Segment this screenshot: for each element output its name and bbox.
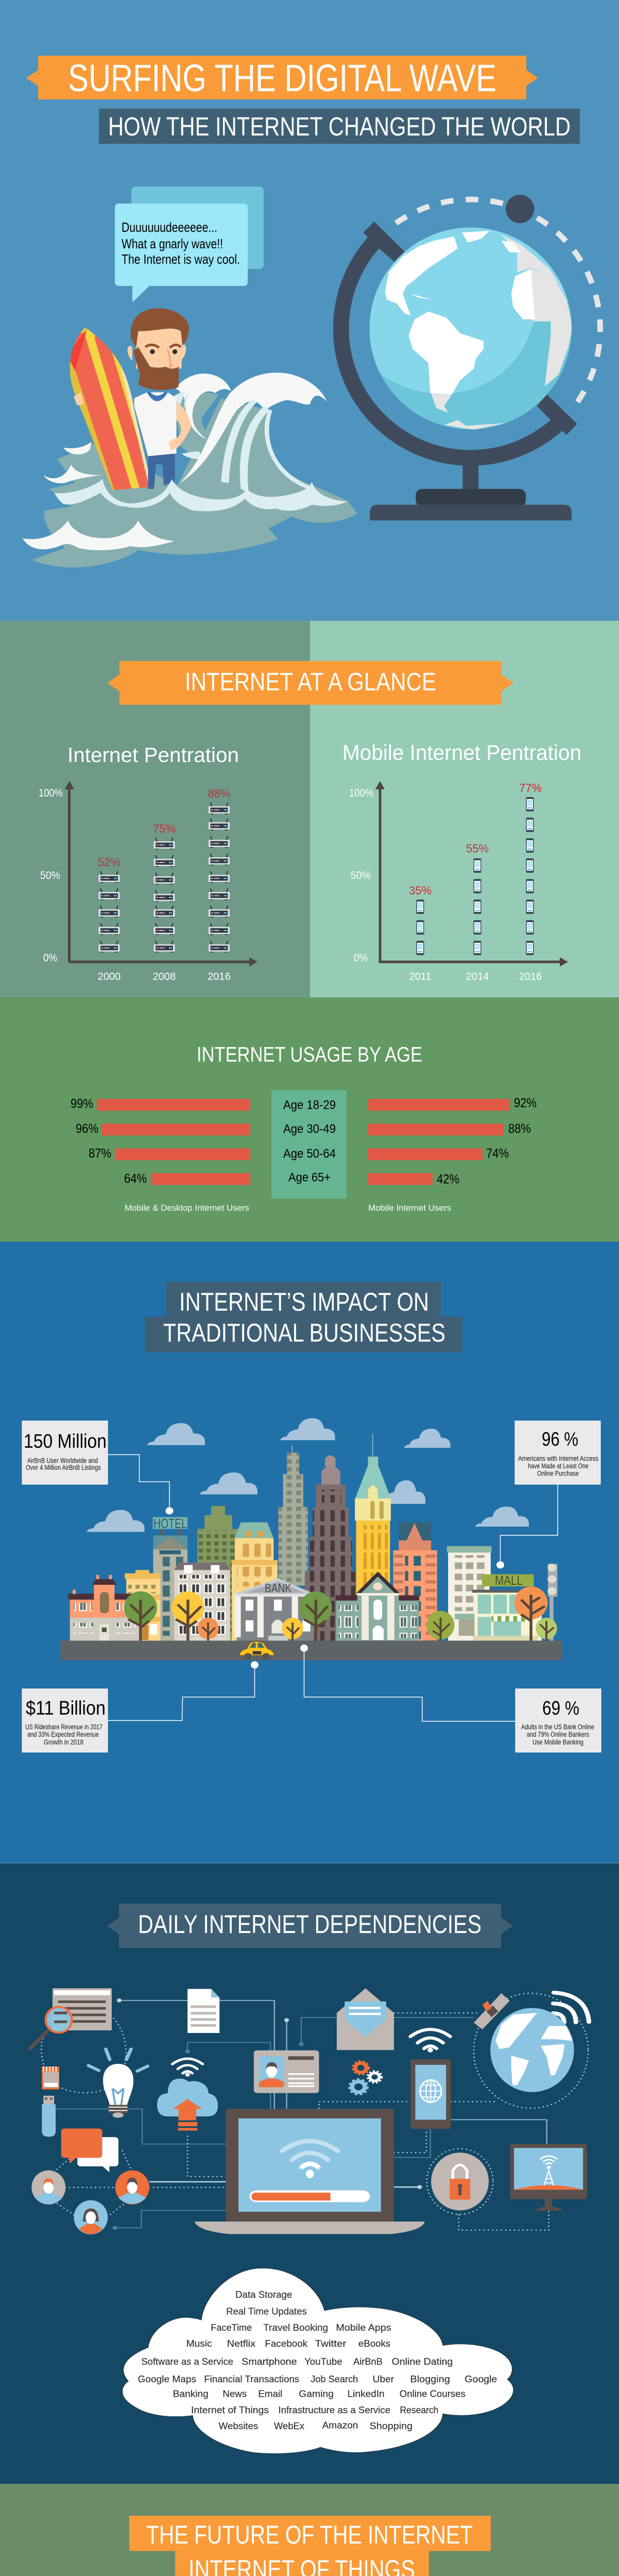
road: [60, 1640, 562, 1660]
icon: smartphone: [410, 2029, 451, 2129]
left bars: mobile and desktop users: Mobile & Desktop Internet Users: [125, 1203, 249, 1213]
word cloud: Banking: [173, 2389, 209, 2399]
sign labels: [153, 1516, 523, 1595]
chart: mobile internet penetration: 50%: [351, 870, 371, 882]
word cloud: FaceTime: [211, 2323, 252, 2333]
panel: future of the internet: [0, 2484, 619, 2576]
icon: gears: [349, 2061, 382, 2094]
word cloud: Research: [400, 2405, 439, 2415]
chart: mobile internet penetration: Mobile Internet Pentration: [342, 740, 581, 765]
chart: internet penetration: Internet Pentration: [67, 744, 239, 767]
chart: internet penetration: 0%: [43, 952, 57, 964]
word cloud: Facebook: [265, 2338, 308, 2349]
word cloud: Amazon: [322, 2420, 358, 2430]
green building: [197, 1506, 239, 1640]
word cloud: Internet of Things: [191, 2405, 269, 2415]
right bars: mobile users: [368, 1096, 537, 1213]
panel: internet usage by age: [0, 997, 619, 1242]
icon: envelope: [337, 1988, 394, 2050]
panel: impact on traditional businesses: [0, 1242, 619, 1863]
word cloud: Smartphone: [242, 2357, 297, 2367]
column 2011: 35%: [409, 884, 432, 897]
word cloud: eBooks: [358, 2338, 390, 2349]
heading block: [145, 1282, 462, 1352]
panel: internet at a glance: [0, 621, 619, 997]
icon: monitor with tower: [510, 2144, 587, 2211]
word cloud: Google Maps: [138, 2374, 196, 2384]
column 2016: 2016: [519, 971, 542, 982]
heading block: THE FUTURE OF THE INTERNET: [146, 2520, 473, 2549]
heading ribbon: [108, 661, 513, 705]
chart: mobile internet penetration: [342, 740, 581, 982]
heading: INTERNET USAGE BY AGE: [197, 1043, 422, 1066]
word cloud: WebEx: [274, 2421, 304, 2431]
stat card: 69 percent: and 79% Online Bankers: [527, 1730, 589, 1738]
stat card: 11 billion: and 33% Expected Revenue: [27, 1730, 99, 1738]
age column: Age 18-29: [283, 1098, 336, 1112]
tall grey tower: [278, 1446, 308, 1586]
stat card: 69 percent: 69 %: [542, 1698, 579, 1719]
stat card: 96 percent: Online Purchase: [537, 1469, 579, 1478]
panel: hero: [23, 56, 603, 568]
word cloud: Real Time Updates: [226, 2307, 307, 2317]
foam: [23, 442, 348, 550]
stat card: 150 million: 150 Million: [24, 1431, 107, 1452]
age column: [271, 1090, 347, 1198]
icon: light bulb: [89, 2049, 148, 2118]
heading ribbon: INTERNET AT A GLANCE: [185, 668, 436, 696]
icon: satellite: [474, 1986, 596, 2032]
column 2016: [519, 782, 542, 982]
taxi: [239, 1641, 274, 1659]
stat card: 11 billion: Growth in 2018: [44, 1738, 83, 1746]
chart: internet penetration: [39, 744, 257, 982]
icon: laptop: [195, 2109, 425, 2234]
column 2016: [208, 787, 231, 982]
word cloud: Blogging: [410, 2374, 450, 2384]
hotel: [153, 1517, 187, 1640]
icon: usb stick: [42, 2096, 56, 2137]
word cloud: Uber: [373, 2374, 394, 2384]
chapel: [336, 1572, 419, 1640]
word cloud: Email: [258, 2389, 282, 2399]
stat card: 69 percent: [515, 1689, 601, 1752]
yellow tower: [355, 1434, 391, 1595]
stat card: 96 percent: Americans with Internet Access: [518, 1454, 598, 1462]
surfer: [74, 308, 191, 489]
word cloud: Music: [186, 2338, 212, 2349]
network lines: [41, 1993, 588, 2230]
speech bubble: The Internet is way cool.: [122, 251, 240, 267]
word cloud: Job Search: [311, 2374, 358, 2384]
icon: document with magnifier: [30, 1988, 112, 2048]
word cloud: Online Dating: [391, 2357, 453, 2367]
stat card: 150 million: [22, 1421, 108, 1484]
heading block: INTERNET’S IMPACT ON: [179, 1287, 429, 1316]
column 2014: 55%: [466, 842, 489, 855]
column 2000: [98, 856, 121, 982]
icon: padlock: [431, 2153, 489, 2210]
column 2008: 75%: [153, 822, 176, 835]
word cloud: Gaming: [299, 2389, 334, 2399]
right bars: mobile users: Mobile Internet Users: [368, 1203, 451, 1213]
column 2000: 52%: [98, 856, 121, 869]
left bars: mobile and desktop users: 64%: [124, 1172, 147, 1186]
chart: mobile internet penetration: 100%: [349, 787, 373, 799]
trees: [124, 1586, 557, 1640]
left bars: mobile and desktop users: [71, 1096, 250, 1213]
icon: id card: [254, 2050, 319, 2093]
chart: mobile internet penetration: 0%: [354, 952, 368, 964]
mall: [472, 1564, 557, 1640]
word cloud: Financial Transactions: [204, 2374, 299, 2384]
bank: [234, 1578, 315, 1640]
speech bubble: Duuuuuudeeeeee...: [122, 219, 217, 235]
stat card: 11 billion: [22, 1689, 108, 1752]
illustration: city skyline: [60, 1418, 562, 1660]
illustration: surfer and waves: [23, 308, 357, 567]
panel: daily internet dependencies: [0, 1863, 619, 2484]
connector lines: [108, 1455, 558, 1721]
icon: cloud upload: [157, 2059, 218, 2130]
column 2011: [409, 884, 432, 982]
left mansion: [68, 1575, 142, 1640]
sign labels: HOTEL: [153, 1516, 187, 1531]
stat card: 150 million: AirBnB User Worldwide and: [27, 1456, 98, 1464]
age column: Age 65+: [288, 1171, 331, 1184]
stat card: 11 billion: $11 Billion: [26, 1698, 106, 1719]
right bars: mobile users: 74%: [486, 1146, 509, 1161]
word cloud: Software as a Service: [141, 2357, 233, 2367]
column 2016: 2016: [208, 971, 231, 982]
word cloud: Data Storage: [235, 2290, 292, 2300]
stat card: 150 million: Over 4 Million AirBnB Listings: [26, 1463, 101, 1471]
salmon building: [393, 1522, 437, 1640]
word cloud: Google: [465, 2374, 497, 2384]
word cloud: LinkedIn: [348, 2389, 385, 2399]
word cloud: YouTube: [304, 2357, 342, 2367]
stat card: 96 percent: 96 %: [542, 1429, 578, 1450]
left bars: mobile and desktop users: 87%: [89, 1146, 111, 1161]
right bars: mobile users: 42%: [437, 1172, 459, 1187]
left bars: mobile and desktop users: 96%: [76, 1122, 98, 1136]
heading ribbon: [107, 1904, 513, 1948]
word cloud: Infrastructure as a Service: [278, 2405, 390, 2415]
word cloud: [122, 2268, 513, 2453]
icon: people: [31, 2171, 149, 2234]
speech bubble: [115, 187, 264, 302]
right bars: mobile users: 88%: [508, 1122, 531, 1136]
chart: internet penetration: 100%: [39, 787, 63, 799]
stat card: 96 percent: [515, 1421, 600, 1484]
sign labels: MALL: [495, 1573, 523, 1588]
heading block: TRADITIONAL BUSINESSES: [163, 1318, 445, 1347]
word cloud: Shopping: [370, 2421, 412, 2431]
heading ribbon: DAILY INTERNET DEPENDENCIES: [138, 1910, 482, 1939]
big wave: [180, 372, 327, 493]
sign labels: BANK: [265, 1582, 291, 1595]
stat card: 96 percent: have Made at Least One: [528, 1462, 589, 1470]
grey rowhouse: [174, 1563, 230, 1640]
icon: sd card: [42, 2066, 59, 2090]
word cloud: Mobile Apps: [336, 2323, 391, 2333]
surfboard: [70, 327, 148, 490]
purple tower: [305, 1455, 355, 1640]
stat card: 69 percent: Adults in the US Bank Online: [521, 1723, 594, 1731]
column 2011: 2011: [409, 971, 432, 982]
heading block: [129, 2516, 491, 2576]
illustration: connected devices: [30, 1986, 596, 2234]
word cloud: News: [222, 2389, 247, 2399]
word cloud: Twitter: [315, 2338, 346, 2349]
word cloud: Online Courses: [400, 2389, 466, 2399]
word cloud: AirBnB: [353, 2357, 383, 2367]
word cloud: Websites: [219, 2421, 258, 2431]
stat card: 11 billion: US Rideshare Revenue in 2017: [25, 1723, 102, 1731]
column 2016: 77%: [519, 782, 542, 794]
title ribbon: SURFING THE DIGITAL WAVE: [68, 57, 496, 99]
cloud shape: [122, 2268, 513, 2453]
stat card: 69 percent: Use Mobile Banking: [532, 1738, 583, 1746]
column 2014: 2014: [466, 971, 489, 982]
speech bubble: What a gnarly wave!!: [122, 236, 223, 251]
age column: Age 30-49: [283, 1122, 336, 1136]
age column: Age 50-64: [283, 1147, 336, 1161]
icon: world globe: [490, 2008, 574, 2092]
left bars: mobile and desktop users: 99%: [71, 1096, 93, 1111]
column 2016: 88%: [208, 787, 231, 800]
icon: chat bubbles: [61, 2129, 118, 2172]
peach building: [232, 1522, 278, 1640]
column 2014: [466, 842, 489, 982]
icon: page: [187, 1989, 219, 2033]
orange building: [125, 1570, 160, 1640]
illustration: globe on stand: [341, 195, 600, 520]
column 2008: 2008: [153, 971, 176, 982]
right bars: mobile users: 92%: [514, 1096, 537, 1110]
word cloud: Travel Booking: [263, 2323, 328, 2333]
column 2008: [153, 822, 176, 982]
column 2000: 2000: [98, 971, 121, 982]
word cloud: Netflix: [227, 2338, 255, 2349]
chart: internet penetration: 50%: [40, 870, 60, 882]
white tower: [447, 1546, 491, 1640]
